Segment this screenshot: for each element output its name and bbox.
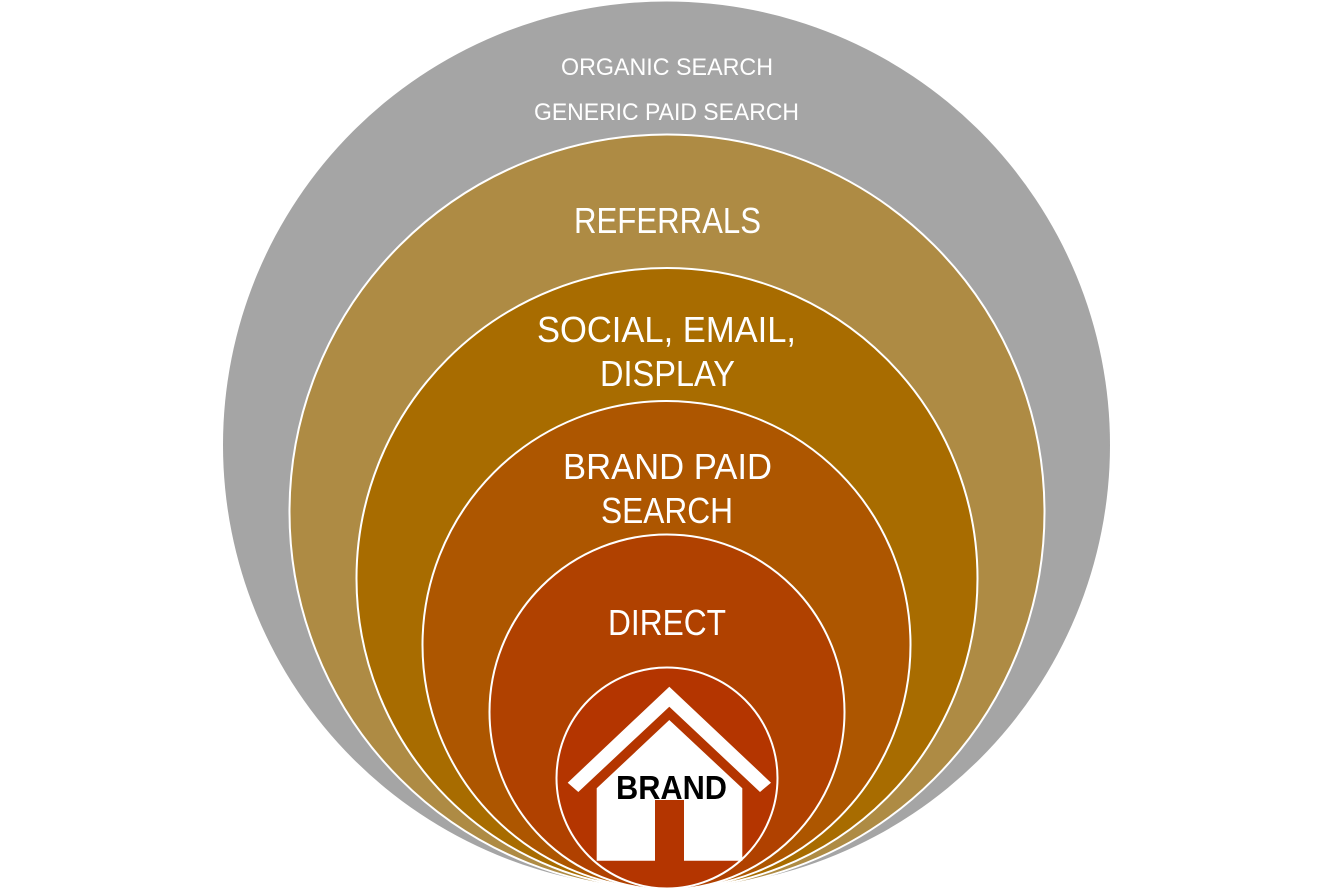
circle: social, email, display bbox=[356, 268, 978, 889]
label: brand paid search: SEARCH bbox=[601, 490, 733, 531]
house roof bbox=[568, 687, 771, 792]
icon: house bbox=[568, 687, 771, 861]
label: brand paid search bbox=[563, 446, 772, 531]
circle: organic and generic paid search bbox=[223, 2, 1110, 888]
house body bbox=[597, 720, 742, 861]
circle: direct bbox=[490, 534, 844, 890]
label: social, email, display: SOCIAL, EMAIL, bbox=[537, 309, 796, 350]
circle: brand paid search bbox=[422, 401, 910, 889]
label: direct: DIRECT bbox=[608, 602, 726, 643]
label: brand paid search: BRAND PAID bbox=[563, 446, 772, 487]
label: organic search: ORGANIC SEARCH bbox=[561, 54, 773, 81]
label: generic paid search: GENERIC PAID SEARCH bbox=[534, 99, 799, 126]
label: brand: BRAND bbox=[616, 769, 727, 806]
label: social, email, display: DISPLAY bbox=[600, 353, 735, 394]
label: social, email, display bbox=[537, 309, 796, 394]
label: referrals: REFERRALS bbox=[574, 200, 761, 241]
circle: brand bbox=[556, 668, 778, 888]
